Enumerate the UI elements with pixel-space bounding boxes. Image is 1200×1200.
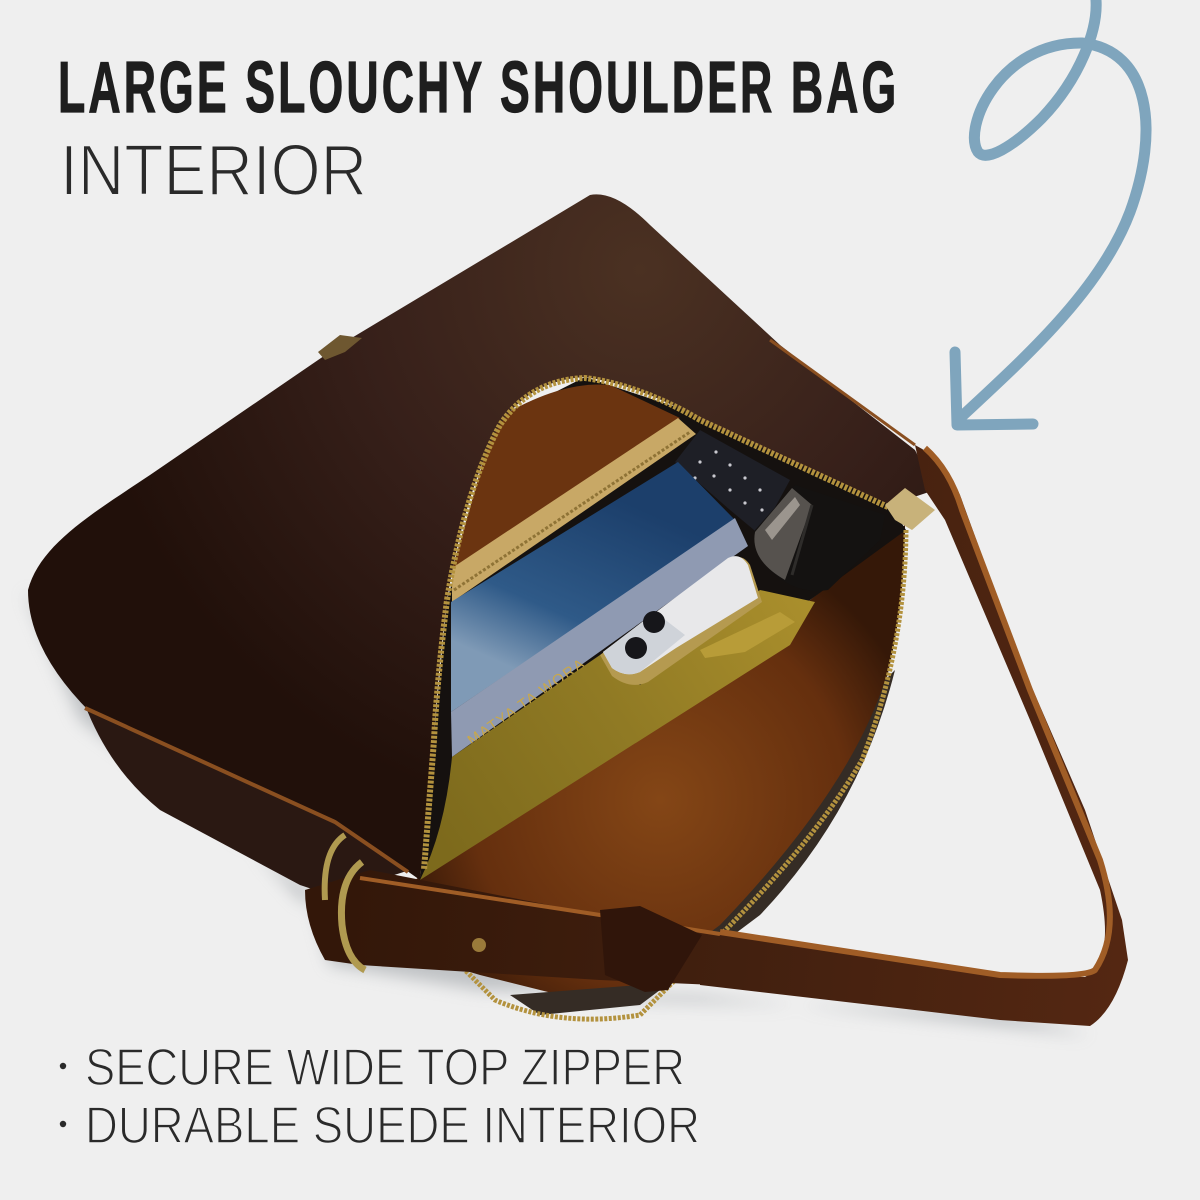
bullet: suede: DURABLE SUEDE INTERIOR [85,1097,700,1155]
pouch strap [700,612,795,658]
heading: interior: INTERIOR [60,131,367,211]
belt keeper loop [600,906,702,992]
back pocket brown lining [452,384,680,570]
right zipper [465,530,906,1019]
polka dot pouch [675,430,790,535]
front leather panel [28,194,935,880]
logo plate [318,335,362,360]
suede interior floor [415,525,905,1005]
belt strap with buckle [305,835,720,992]
phone [600,556,762,685]
illustration: open shoulder bag [24,194,1128,1035]
arrow: curly blue arrow pointing to the bag [955,0,1146,425]
grey notebook edge with gold lettering [451,518,748,757]
tan side edge of leather [770,340,915,445]
strap edge: tan stitched edge [720,448,1110,976]
bag lower panel [85,705,410,895]
brass ring [341,862,365,970]
blue notebook [451,462,735,712]
thermos bottle [754,485,885,591]
inner wall dark backdrop [420,377,906,880]
brass rivet [472,938,486,952]
lower tan seam [85,708,408,872]
heading: product name: LARGE SLOUCHY SHOULDER BAG [58,47,896,128]
bullet: zipper: SECURE WIDE TOP ZIPPER [85,1039,685,1097]
grey notebook edge with gold lettering: MATYA TA WORA [465,655,589,749]
top zipper [424,378,888,870]
strap: rising side to the zipper end [700,445,1128,1026]
bullet list: features [60,1039,700,1155]
brass loop [325,835,345,900]
gold zip pocket [452,418,696,602]
gold leather wallet [420,590,815,880]
zipper pull [885,488,935,530]
bag shadow [24,590,1090,1035]
interior dark lining edge [510,670,895,1015]
